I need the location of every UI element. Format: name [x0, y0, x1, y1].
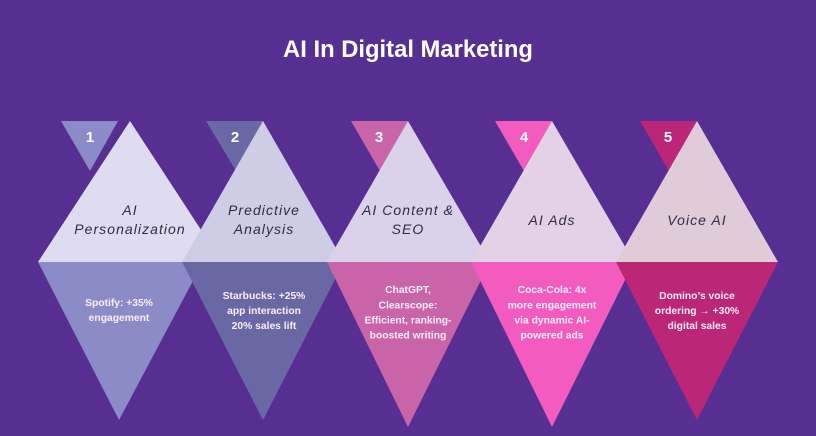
body text: ChatGPT: boosted writing [370, 330, 446, 342]
number badge 3: 3 [375, 129, 383, 146]
heading: AI Personalization: AI [121, 202, 138, 218]
heading: AI Content and SEO: AI Content & [361, 202, 454, 218]
lower triangle 1 [38, 262, 203, 420]
upper triangle 4 [471, 121, 634, 262]
number badge 3 [351, 121, 408, 171]
number badge 2: 2 [231, 129, 239, 146]
body text: ChatGPT: ChatGPT, [385, 285, 431, 296]
heading: AI Personalization: Personalization [74, 221, 186, 237]
upper triangle 2 [182, 121, 344, 262]
heading: AI Content and SEO: SEO [392, 221, 424, 237]
body text: Coca-Cola: via dynamic AI- [514, 316, 590, 326]
number badge 4 [495, 121, 552, 171]
number badge 2 [206, 121, 264, 171]
step 2: Predictive Analysis [182, 121, 344, 420]
step 4: AI Ads [471, 121, 634, 427]
heading: Voice AI: Voice AI [667, 212, 727, 228]
title: AI In Digital Marketing [283, 36, 533, 63]
lower triangle 3 [327, 262, 490, 427]
number badge 1 [61, 121, 118, 171]
step 1: AI Personalization [38, 121, 222, 420]
body text: Domino's: ordering → +30% [655, 306, 739, 317]
body text: Coca-Cola: more engagement [508, 300, 597, 312]
body text: Starbucks: Starbucks: +25% [223, 291, 305, 302]
lower triangle 4 [471, 262, 634, 427]
body text: Starbucks: app interaction [227, 306, 301, 317]
upper triangle 5 [616, 121, 778, 262]
number badge 5 [640, 121, 697, 171]
body text: ChatGPT: Clearscope: [379, 300, 437, 312]
step 3: AI Content and SEO [327, 121, 490, 427]
number badge 4: 4 [520, 129, 529, 146]
body text: Coca-Cola: Coca-Cola: 4x [518, 285, 587, 296]
body text: ChatGPT: Efficient, ranking- [365, 316, 452, 326]
heading: Predictive Analysis: Analysis [233, 221, 294, 237]
number badge 1: 1 [86, 129, 94, 146]
heading: Predictive Analysis: Predictive [228, 202, 300, 218]
body text: Starbucks: 20% sales lift [232, 321, 297, 332]
upper triangle 1 [38, 121, 222, 262]
body text: Domino's: Domino’s voice [659, 291, 735, 302]
body text: Spotify: Spotify: +35% [85, 298, 153, 309]
step 5: Voice AI [616, 121, 778, 420]
body text: Coca-Cola: powered ads [521, 330, 584, 342]
body text: Spotify: engagement [89, 313, 150, 324]
lower triangle 5 [616, 262, 778, 420]
body text: Domino's: digital sales [668, 321, 727, 332]
heading: AI Ads: AI Ads [527, 212, 576, 228]
number badge 5: 5 [664, 129, 672, 146]
upper triangle 3 [327, 121, 490, 262]
lower triangle 2 [182, 262, 344, 420]
